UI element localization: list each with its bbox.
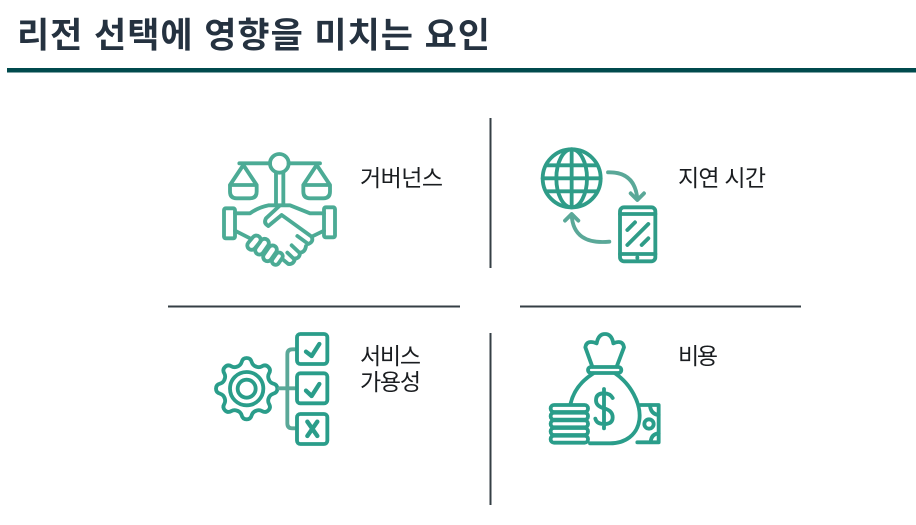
checkbox 1 xyxy=(297,334,327,364)
title underline xyxy=(7,68,916,72)
label: service availability: 가용성 xyxy=(360,369,421,395)
label: service availability xyxy=(360,343,421,395)
bag xyxy=(585,334,624,367)
label: service availability: 서비스 xyxy=(360,343,421,369)
icon: gear and checklist (service availability) xyxy=(216,334,327,444)
label: latency: 지연 시간 xyxy=(678,165,766,191)
coins xyxy=(551,405,588,412)
phone xyxy=(620,207,655,261)
label: cost: 비용 xyxy=(678,343,718,369)
label: governance: 거버넌스 xyxy=(360,165,443,191)
bill xyxy=(637,405,659,442)
dollar sign xyxy=(595,389,613,428)
title: 리전 선택에 영향을 미치는 요인 xyxy=(17,16,490,56)
icon: scales and handshake (governance) xyxy=(224,154,335,266)
arrow: globe to phone xyxy=(608,172,644,200)
gear xyxy=(216,358,277,419)
connector lines xyxy=(279,349,297,428)
icon: money bag, coins and bill (cost) xyxy=(551,334,659,443)
checkbox 2 xyxy=(297,373,327,403)
checkbox 3 xyxy=(297,414,327,444)
globe xyxy=(543,149,601,207)
quadrant dividers xyxy=(168,118,801,505)
icon: globe and phone (latency) xyxy=(543,149,655,261)
arrow: phone to globe xyxy=(565,214,609,242)
